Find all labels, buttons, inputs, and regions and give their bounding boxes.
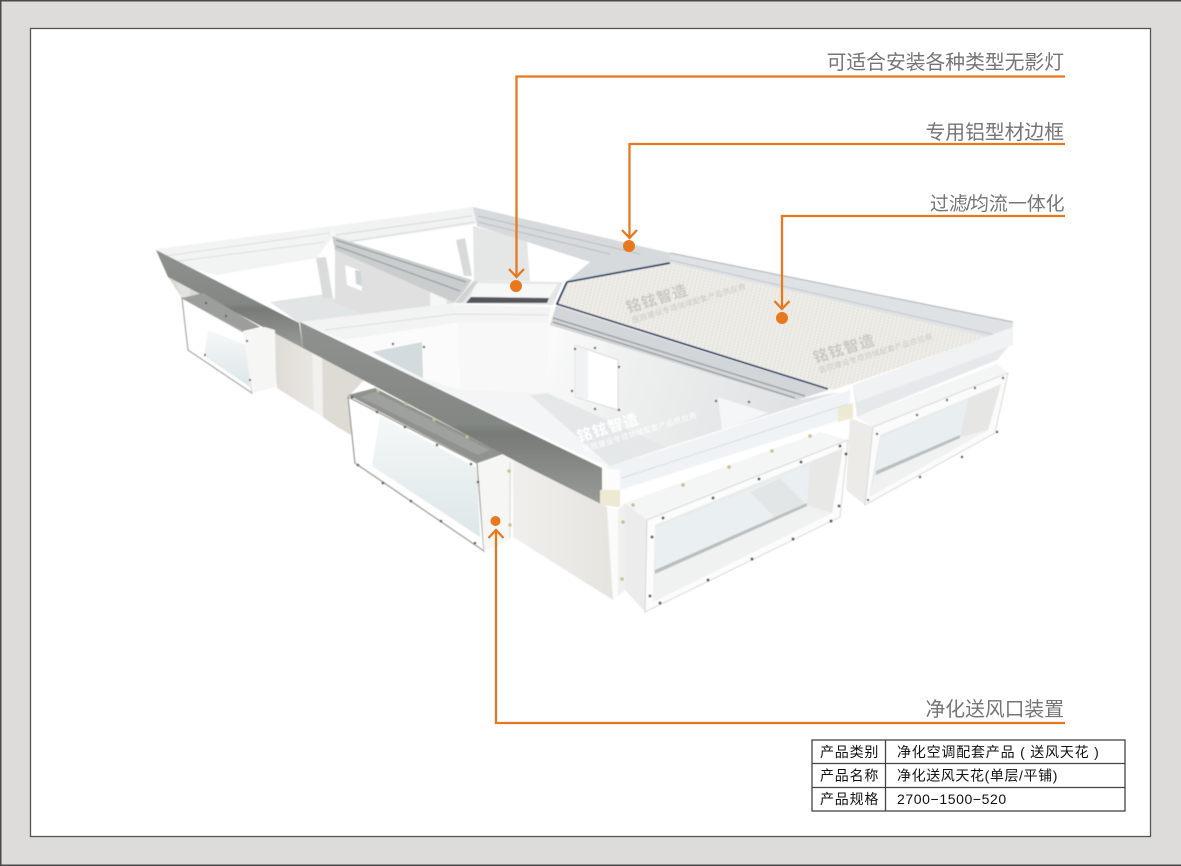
leader: filter and flow equalizer callout [774,216,1065,324]
watermark on filter, upper [624,264,747,325]
grey aluminium rail: front unit [300,322,602,507]
front duct with flange [625,432,848,612]
watermark on front unit [575,393,698,454]
row: product category: 净化空调配套产品 ( 送风天花 ) [897,744,1100,760]
grey aluminium rail: left unit [156,250,303,348]
front unit corner and right face [600,390,853,507]
panel: front unit interior [300,303,850,468]
floor [345,345,667,468]
label: 专用铝型材边框: 专用铝型材边框 [926,122,1064,144]
beam between front unit and filter [550,306,828,400]
left unit lower walls [168,277,364,435]
row: product specification: 产品规格 [820,791,879,807]
filter navy edge [557,263,828,389]
watermark on filter, lower: 医院建设专项领域配套产品供应商 [818,332,934,375]
right duct flange [865,373,1008,505]
center octagon opening [453,281,563,305]
watermark on front unit: 医院建设专项领域配套产品供应商 [582,411,698,454]
watermark on front unit: 铭铉智造 [575,410,641,446]
far right window [718,397,768,430]
watermark on filter, lower: 铭铉智造 [811,331,877,367]
right interior wall [547,323,840,447]
filter media [556,263,987,390]
leader: aluminium frame callout [622,144,1065,252]
left duct [182,293,276,393]
row: product specification: 2700−1500−520 [897,791,1007,807]
left window [372,342,423,378]
product illustration: air supply ceiling unit [156,207,1013,612]
panel: right unit front face and duct [846,327,1013,505]
watermark on filter, upper: 铭铉智造 [624,281,690,317]
leader: air outlet device callout [488,516,1065,723]
label: 过滤/均流一体化: 过滤/均流一体化 [930,193,1065,215]
brass fixing bolts [376,389,812,581]
row: product name [820,768,1058,784]
specification table [812,740,1125,811]
floor shadow [530,393,667,466]
table grid [812,740,1125,811]
row: product category: 产品类别 [820,744,879,760]
row: product specification [820,791,1007,807]
watermark on filter, lower [811,314,934,375]
watermark on filter, upper: 医院建设专项领域配套产品供应商 [631,282,747,325]
front lower wall [513,460,625,600]
label: 可适合安装各种类型无影灯: 可适合安装各种类型无影灯 [827,52,1064,74]
flange bolts [204,302,1004,604]
row: product name: 产品名称 [820,768,879,784]
leader: shadowless lamp mount callout [509,76,1065,292]
label: 净化送风口装置: 净化送风口装置 [926,699,1064,721]
middle partition wall with window [332,236,472,318]
panel: filter with outer right rim [556,253,1013,390]
back interior wall [458,322,548,393]
row: product name: 净化送风天花(单层/平铺) [897,768,1058,784]
front-left duct [348,388,513,551]
right window [575,345,618,410]
panel: back unit interior [332,207,670,318]
panel: back-left unit interior [156,226,372,325]
